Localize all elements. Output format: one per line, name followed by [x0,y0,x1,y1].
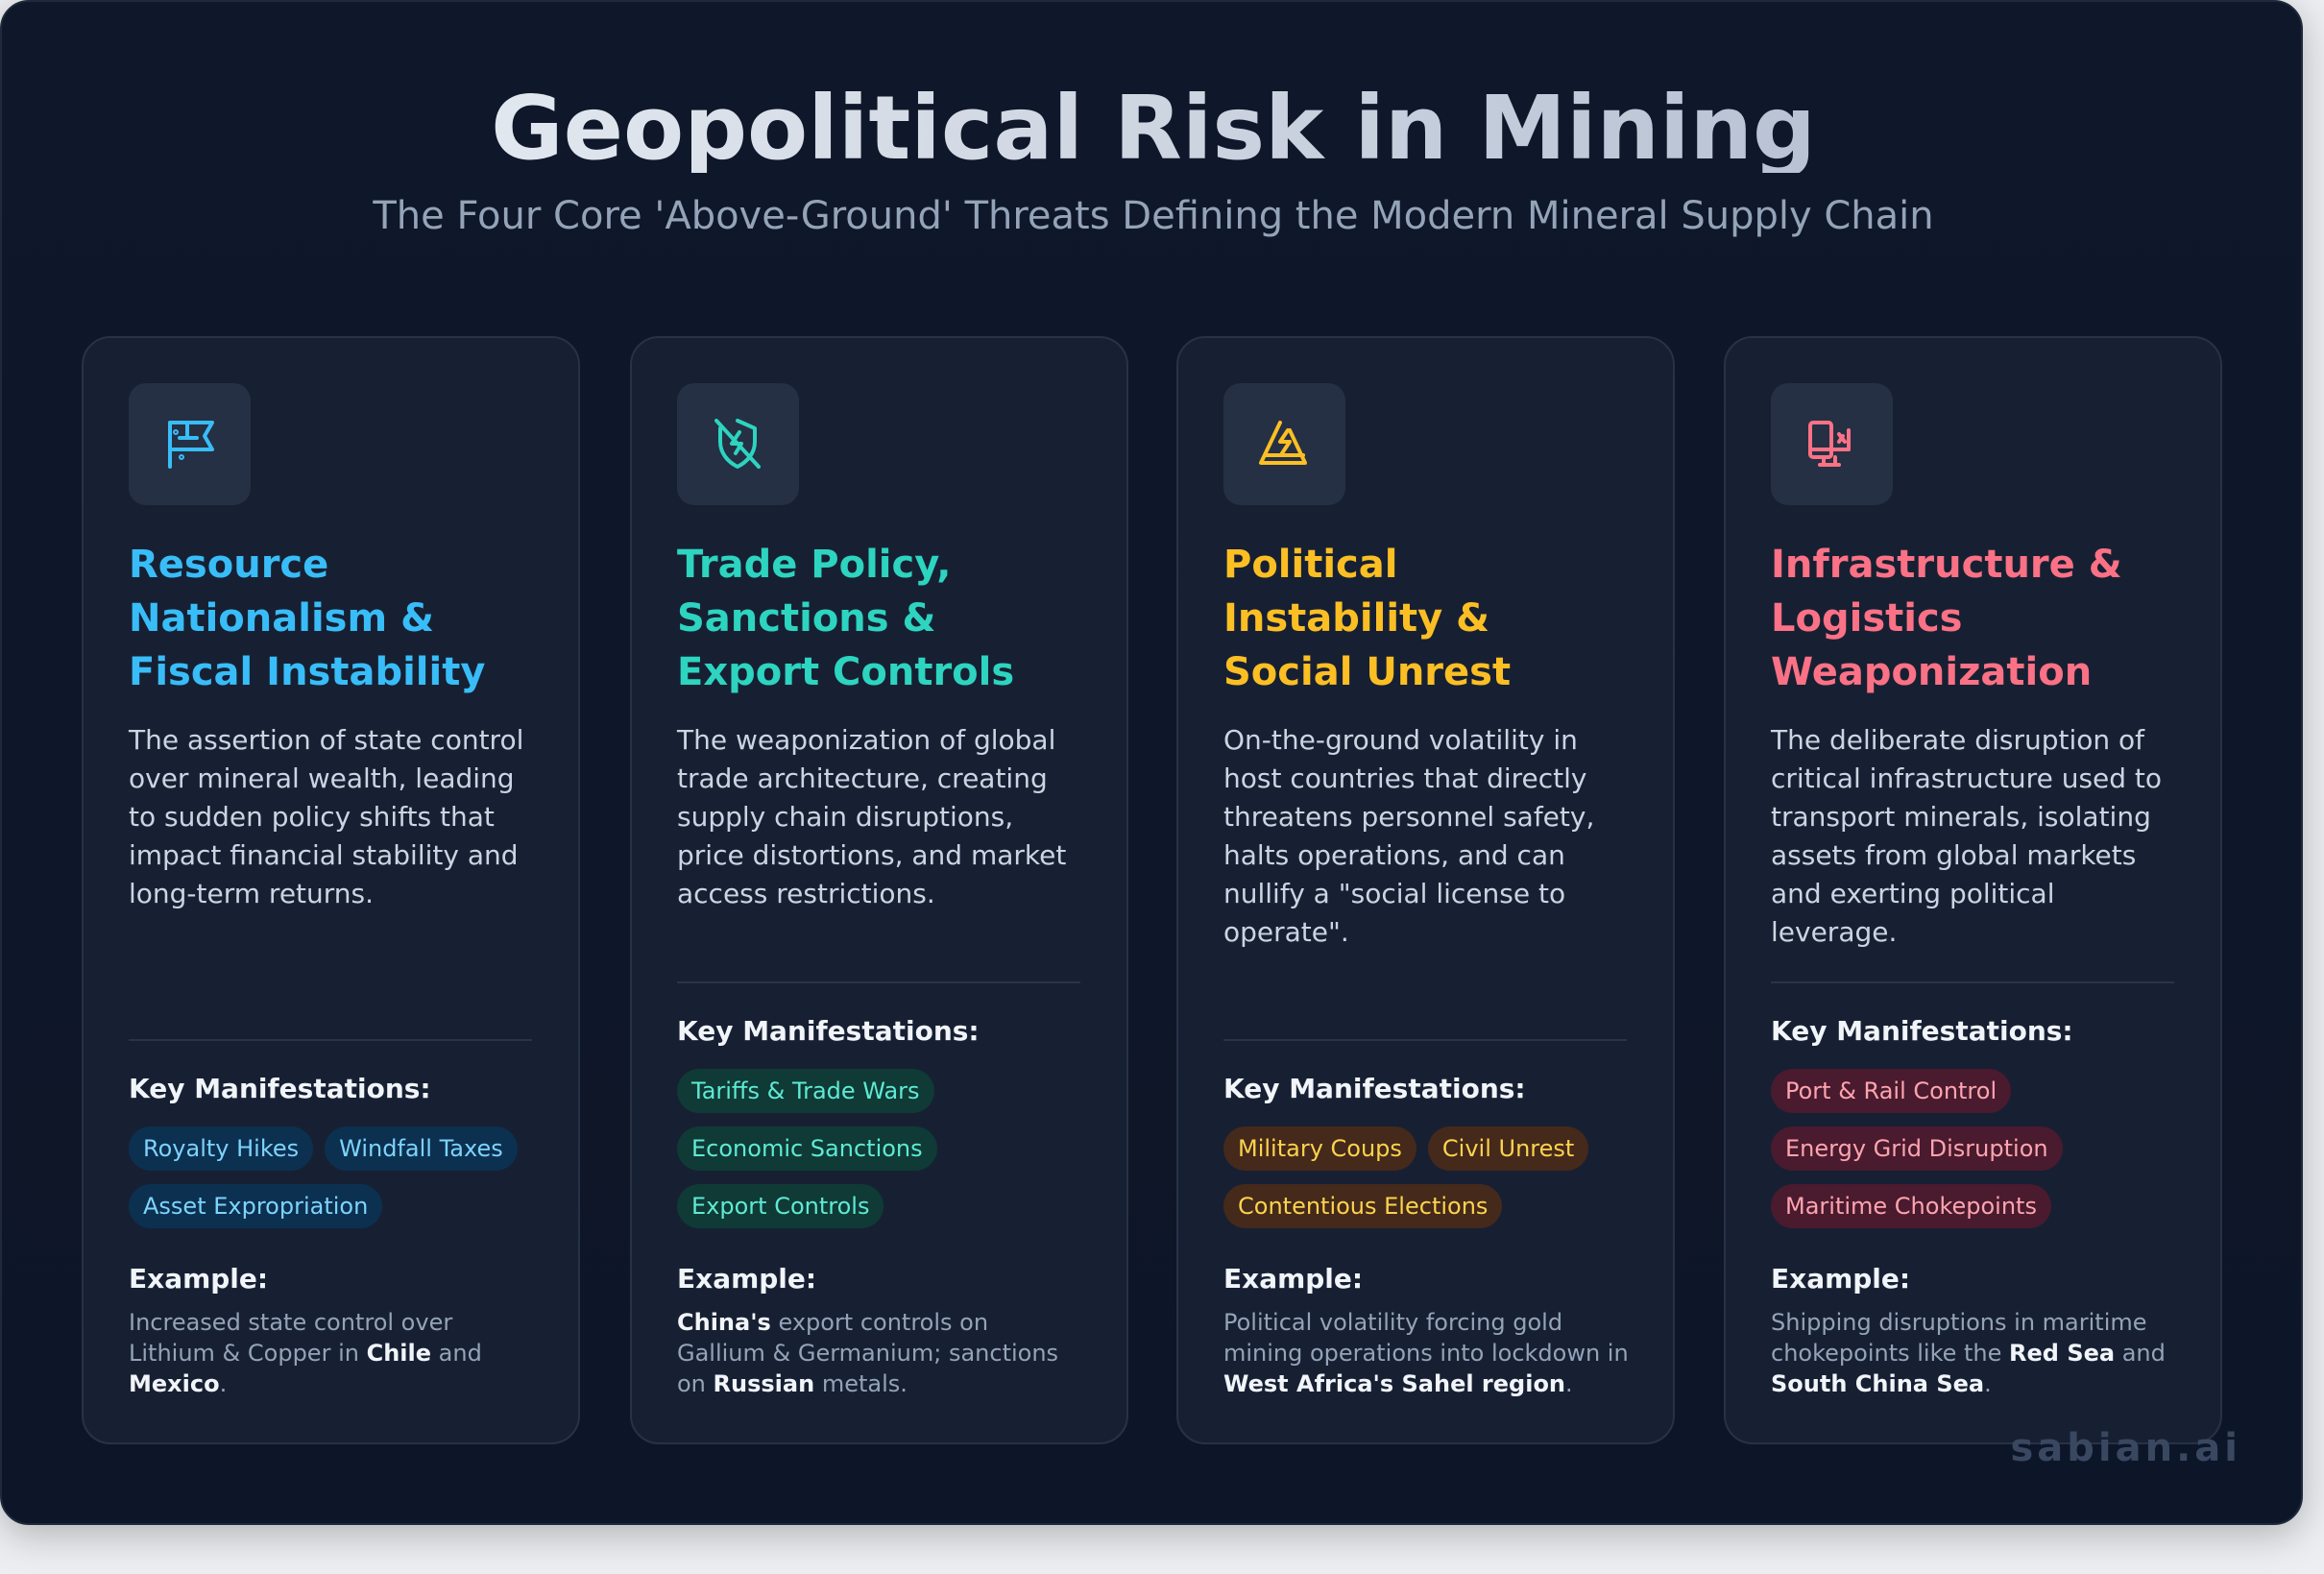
heading: Instability & [1223,596,1489,641]
icon: desktop [1771,383,1893,505]
example text: mining operations into lockdown in [1223,1340,1629,1367]
icon: flag [129,383,251,505]
description: The weaponization of global trade architecture, creating supply chain disruptions, price distortions, and market access restrictions. [677,724,1066,909]
panel: resource nationalism [82,336,580,1444]
description: The assertion of state control over mineral wealth, leading to sudden policy shifts that impact financial stability and long-term returns. [129,724,523,909]
watermark: sabian.ai [2010,1426,2241,1470]
tags: Asset Expropriation [143,1193,368,1220]
heading [1223,543,1511,694]
example text: Increased state control over Lithium & Copper in Chile and Mexico. [129,1309,482,1397]
panel: trade policy [630,336,1128,1444]
tags [129,1126,518,1228]
tags: Civil Unrest [1442,1135,1574,1162]
heading: Social Unrest [1223,650,1511,694]
tags: Tariffs & Trade Wars [691,1078,920,1104]
heading: Resource Nationalism & Fiscal Instability [129,543,485,694]
example heading: Example: [1771,1263,1910,1295]
tags: Windfall Taxes [339,1135,503,1162]
example heading: Example: [677,1263,816,1295]
icon: shield off [677,383,799,505]
tags: Military Coups [1238,1135,1402,1162]
example text: Political volatility forcing gold [1223,1309,1562,1336]
heading: Political [1223,543,1397,587]
title: Geopolitical Risk in Mining [491,77,1816,180]
tags: Energy Grid Disruption [1785,1135,2048,1162]
tags: Maritime Chokepoints [1785,1193,2037,1220]
key manifestations: Key Manifestations: [1771,1015,2073,1047]
title [2,85,2305,173]
example heading: Example: [1223,1263,1363,1295]
example text: China's export controls on Gallium & Germanium; sanctions on Russian metals. [677,1309,1058,1397]
key manifestations: Key Manifestations: [1223,1073,1526,1104]
example heading: Example: [129,1263,268,1295]
tags [1223,1126,1588,1228]
subtitle: The Four Core 'Above-Ground' Threats Defining the Modern Mineral Supply Chain [373,194,1934,238]
heading: Infrastructure & Logistics Weaponization [1771,543,2122,694]
tags: Economic Sanctions [691,1135,923,1162]
tags: Port & Rail Control [1785,1078,1997,1104]
tags: Contentious Elections [1238,1193,1488,1220]
key manifestations: Key Manifestations: [129,1073,431,1104]
tags [1771,1069,2063,1228]
tags: Export Controls [691,1193,869,1220]
example text: Shipping disruptions in maritime chokepoints like the Red Sea and South China Sea. [1771,1309,2166,1397]
example text: West Africa's Sahel region. [1223,1370,1573,1397]
description: On-the-ground volatility in host countries that directly threatens personnel safety, halts operations, and can nullify a "social license to operate". [1223,724,1594,948]
heading: Trade Policy, Sanctions & Export Controls [677,543,1014,694]
description: The deliberate disruption of critical infrastructure used to transport minerals, isolating assets from global markets and exerting political leverage. [1771,724,2162,948]
example text [1223,1309,1629,1397]
key manifestations: Key Manifestations: [677,1015,980,1047]
icon: warning mountain [1223,383,1345,505]
tags: Royalty Hikes [143,1135,299,1162]
panel: political instability [1176,336,1675,1444]
tags [677,1069,937,1228]
panel: infrastructure [1724,336,2222,1444]
